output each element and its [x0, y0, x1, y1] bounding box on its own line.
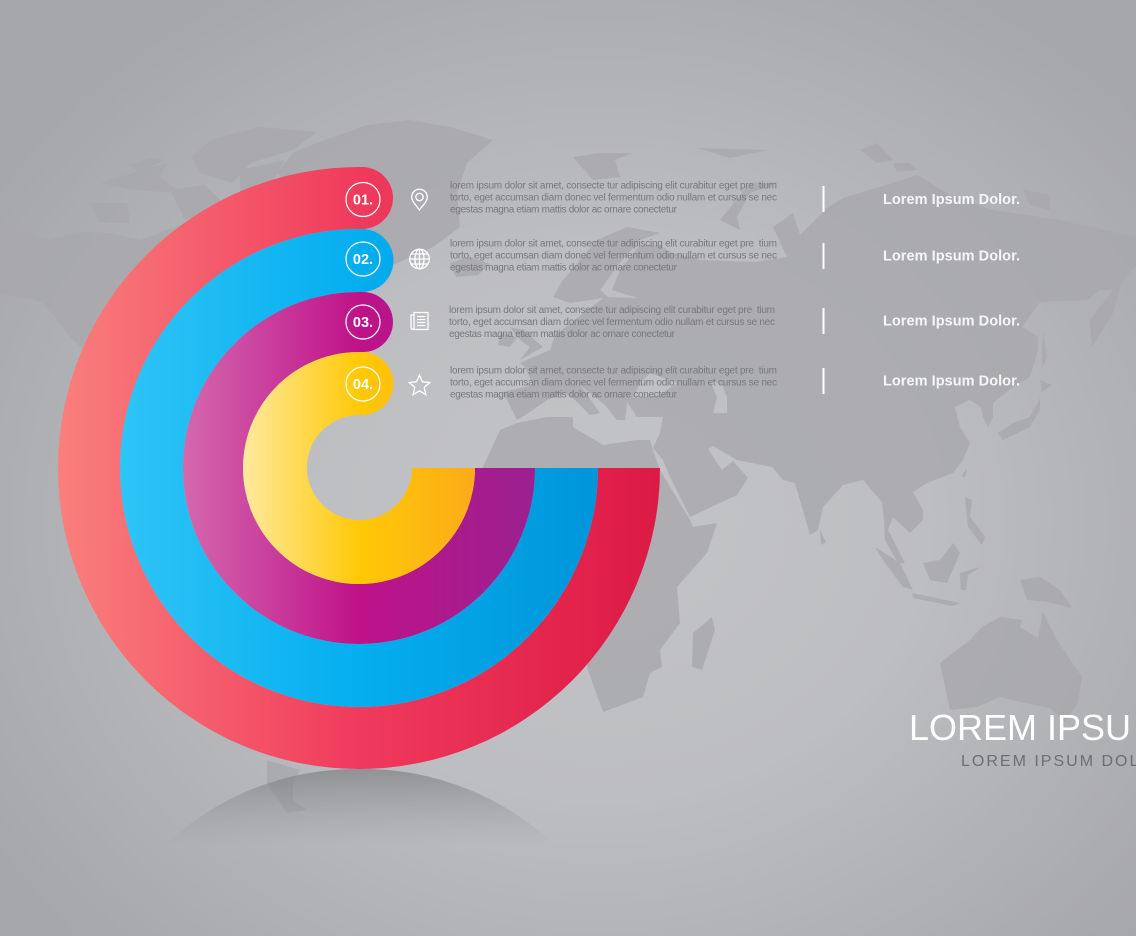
badge 04: 04. [353, 377, 373, 393]
text block 03 [449, 305, 775, 340]
map: Arctic Russian islands [697, 143, 1050, 210]
text block 02: lorem ipsum dolor sit amet, consecte tur adipiscing elit curabitur eget pre tium [450, 238, 777, 250]
badge 03: 03. [353, 315, 373, 331]
map: Eurasia [503, 175, 1136, 563]
text block 01 [450, 180, 777, 216]
text block 03: lorem ipsum dolor sit amet, consecte tur adipiscing elit curabitur eget pre tium [449, 305, 775, 316]
text block 01: torto, eget accumsan diam donec vel fermentum odio nullam et cursus se nec [450, 192, 777, 204]
ring 01: red [58, 167, 660, 769]
ring 03: purple [183, 292, 535, 644]
text block 04: torto, eget accumsan diam donec vel fermentum odio nullam et cursus se nec [450, 378, 777, 388]
label 01: Lorem Ipsum Dolor. [883, 192, 1020, 208]
map: Scandinavia [553, 227, 660, 303]
map: Sumatra and Java [875, 547, 960, 606]
map: Borneo [923, 543, 960, 583]
map: British Isles [498, 327, 543, 360]
ring 02: blue [120, 229, 598, 707]
label 02: Lorem Ipsum Dolor. [883, 248, 1020, 264]
map: Philippines [965, 497, 985, 545]
icon: newspaper [411, 312, 428, 330]
icon: star [409, 375, 430, 395]
badge 04 [346, 367, 380, 401]
map: Iceland [450, 257, 490, 277]
subtitle: LOREM IPSUM DOL [961, 753, 1136, 770]
text block 01: egestas magna etiam mattis dolor ac ornare conectetur [450, 204, 678, 216]
map: New Guinea [1020, 577, 1072, 608]
map: Taiwan and Sri Lanka [820, 468, 967, 545]
map: Sulawesi [960, 567, 980, 590]
text block 02: torto, eget accumsan diam donec vel fermentum odio nullam et cursus se nec [450, 250, 777, 262]
map: Sakhalin and Japan [998, 332, 1052, 440]
text block 04: lorem ipsum dolor sit amet, consecte tur adipiscing elit curabitur eget pre tium [450, 366, 777, 376]
text block 02 [450, 238, 777, 274]
map: Canadian arctic islands [90, 127, 317, 223]
map: North America [0, 215, 360, 480]
title: LOREM IPSU [909, 707, 1131, 748]
map: Greenland [277, 120, 493, 265]
text block 04: egestas magna etiam mattis dolor ac ornare conectetur [450, 390, 678, 400]
text block 01: lorem ipsum dolor sit amet, consecte tur adipiscing elit curabitur eget pre tium [450, 180, 777, 192]
text block 03: torto, eget accumsan diam donec vel fermentum odio nullam et cursus se nec [449, 317, 775, 328]
icon: location pin [412, 189, 427, 210]
badge 03 [346, 305, 380, 339]
icon: globe [410, 249, 429, 269]
badge 02: 02. [353, 252, 373, 268]
world map [0, 120, 1136, 813]
map: Madagascar [692, 617, 715, 670]
ring reflection shadow [160, 769, 560, 850]
badge 01: 01. [353, 192, 373, 208]
label 04: Lorem Ipsum Dolor. [883, 374, 1020, 390]
badge 02 [346, 242, 380, 276]
map: Africa [470, 417, 717, 712]
concentric ring chart [58, 167, 660, 769]
map: South America [267, 760, 307, 813]
text block 03: egestas magna etiam mattis dolor ac ornare conectetur [449, 329, 676, 340]
map: Australia [940, 612, 1082, 722]
badge 01 [346, 182, 380, 216]
ring 04: yellow [243, 352, 475, 584]
text block 02: egestas magna etiam mattis dolor ac ornare conectetur [450, 262, 678, 274]
map: Novaya Zemlya [720, 182, 780, 230]
map: Svalbard [573, 153, 633, 180]
text block 04 [450, 366, 777, 400]
label 03: Lorem Ipsum Dolor. [883, 314, 1020, 330]
